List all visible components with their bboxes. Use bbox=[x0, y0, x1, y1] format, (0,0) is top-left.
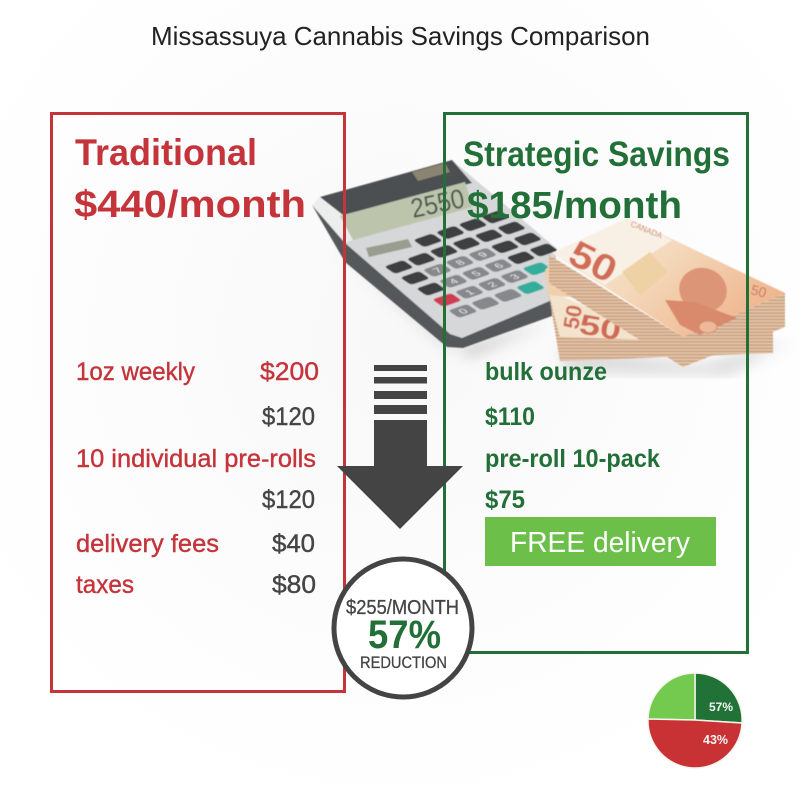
callout: reduction badge: $255/MONTH bbox=[346, 597, 459, 619]
panel border: traditional bbox=[52, 114, 344, 692]
icon: banknote stacks bbox=[545, 218, 790, 375]
traditional cost rows: $120 bbox=[262, 486, 315, 514]
callout: reduction badge: REDUCTION bbox=[360, 653, 447, 672]
calculator keys bbox=[368, 210, 590, 318]
strategic savings monthly cost: $185/month bbox=[467, 185, 682, 227]
pie chart: 43% bbox=[703, 732, 728, 747]
callout: reduction badge: 57% bbox=[368, 613, 441, 657]
upper stack bbox=[549, 218, 785, 367]
pie chart: 57% bbox=[709, 700, 733, 714]
traditional cost rows: 10 individual pre-rolls bbox=[76, 445, 316, 473]
traditional heading: Traditional bbox=[75, 132, 257, 173]
traditional cost rows: 1oz weekly bbox=[76, 358, 195, 386]
strategic savings rows bbox=[485, 358, 660, 514]
traditional cost rows: $120 bbox=[262, 403, 315, 431]
strategic savings rows: pre-roll 10-pack bbox=[485, 445, 660, 473]
panel border: strategic savings bbox=[444, 114, 748, 652]
arrow: savings down arrow bbox=[337, 365, 463, 529]
lower stack bbox=[545, 262, 773, 361]
strategic savings rows: $75 bbox=[485, 486, 525, 514]
traditional cost rows: taxes bbox=[76, 571, 134, 599]
upper stack: 50 bbox=[749, 281, 768, 301]
upper stack: CANADA bbox=[629, 220, 664, 241]
title: Missassuya Cannabis Savings Comparison bbox=[151, 21, 650, 51]
strategic savings heading: Strategic Savings bbox=[463, 135, 730, 174]
lower stack: 50 bbox=[558, 303, 587, 331]
strategic savings rows: bulk ounze bbox=[485, 358, 607, 386]
callout: reduction badge bbox=[334, 559, 472, 697]
traditional cost rows: $80 bbox=[272, 571, 316, 599]
traditional cost rows: $40 bbox=[272, 530, 315, 558]
traditional cost rows: delivery fees bbox=[76, 530, 219, 558]
pie chart bbox=[648, 673, 742, 768]
lower stack: 50 bbox=[577, 308, 624, 346]
strategic savings rows: $110 bbox=[485, 403, 535, 431]
icon: calculator: 2550 bbox=[408, 183, 467, 224]
panel: strategic savings bbox=[444, 114, 748, 652]
traditional cost rows: $200 bbox=[260, 358, 319, 386]
icon: calculator bbox=[312, 160, 590, 358]
traditional cost rows bbox=[76, 358, 319, 599]
free delivery badge bbox=[485, 517, 716, 566]
upper stack: 50 bbox=[562, 233, 624, 291]
free delivery badge: FREE delivery bbox=[510, 527, 690, 559]
traditional monthly cost: $440/month bbox=[74, 184, 306, 226]
panel: traditional bbox=[52, 114, 344, 692]
